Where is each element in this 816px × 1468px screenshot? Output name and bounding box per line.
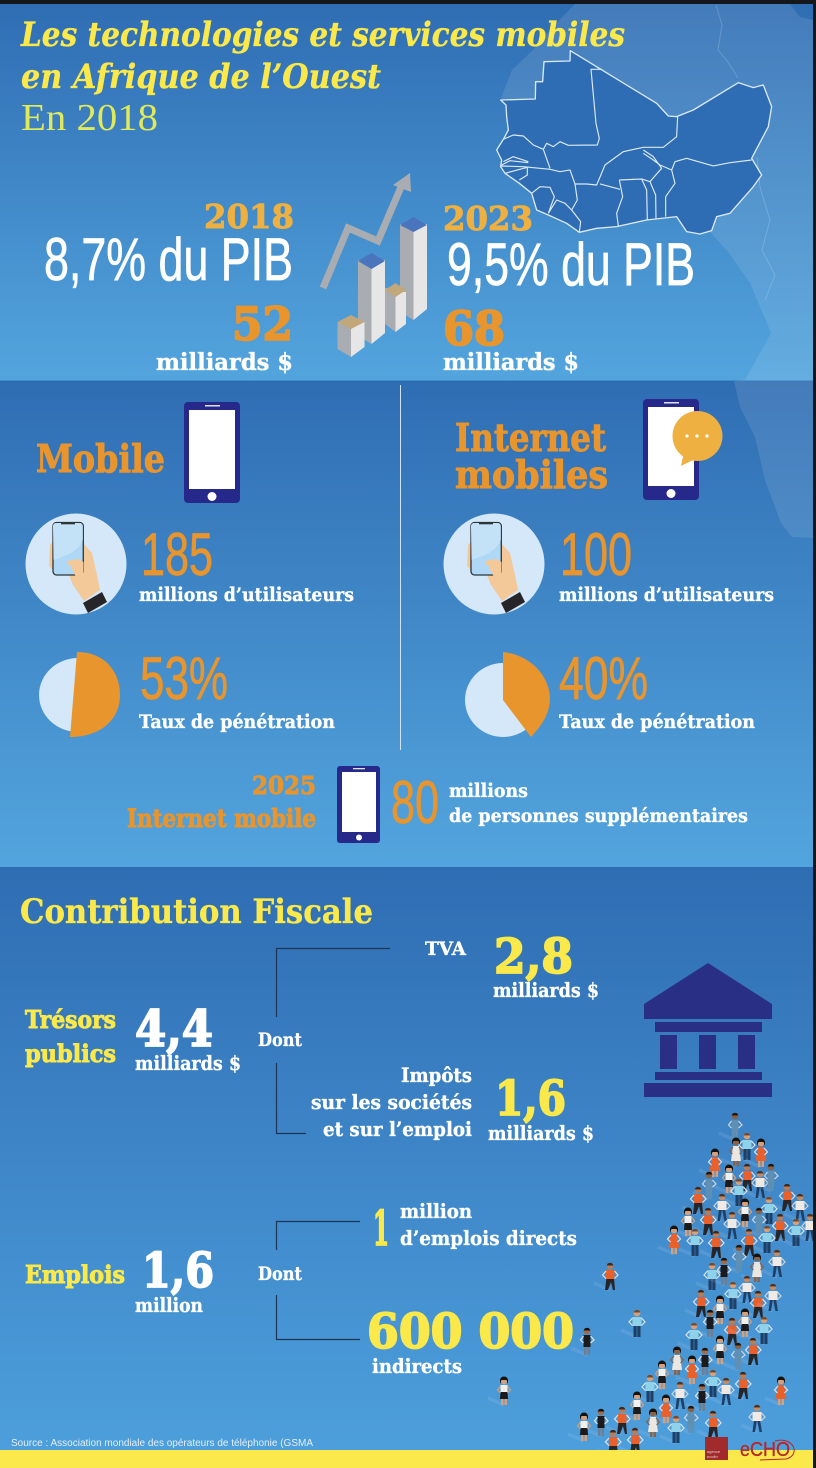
heading: Contribution Fiscale: Contribution Fiscale — [20, 892, 373, 932]
connector lines — [276, 948, 390, 1340]
top dark edge — [0, 0, 816, 4]
stat: 100 million users: millions d’utilisateurs — [559, 584, 774, 606]
map: Africa silhouette — [501, 4, 813, 538]
stats 2023: 9,5% du PIB — [447, 231, 695, 298]
logo: Echo: eCHO — [740, 1439, 790, 1461]
label: Emplois: Emplois — [25, 1260, 125, 1289]
label: TVA: TVA — [425, 938, 466, 960]
logo: red square — [705, 1437, 728, 1460]
stat: 600 000 indirect jobs: indirects — [372, 1354, 462, 1378]
stat: 1,6 milliards — [488, 1071, 594, 1145]
heading: Internet mobiles: mobiles — [455, 452, 608, 497]
stat: 80 million additional people — [391, 769, 748, 836]
panel: mobile background — [0, 380, 813, 868]
label: Dont: Dont — [258, 1263, 302, 1285]
heading: Mobile: Mobile — [36, 436, 165, 481]
label: 2025 Internet mobile — [127, 771, 316, 833]
label: corporate and employment taxes — [311, 1063, 472, 1141]
stat: 2,8 milliards: milliards $ — [493, 978, 599, 1002]
stat: 185 million users — [139, 521, 354, 606]
stat: 80 million additional people: de personnes supplémentaires — [449, 805, 748, 827]
stats 2018: milliards $ — [156, 349, 293, 376]
label: Dont: Dont — [258, 1029, 302, 1051]
stats 2018 — [44, 197, 294, 376]
stat: 1,6 million jobs: 1,6 — [142, 1243, 214, 1299]
stat: 53% penetration — [139, 645, 335, 733]
stat: 4,4 milliards: 4,4 — [135, 999, 213, 1058]
icon: hand holding phone — [26, 514, 126, 614]
pie chart: 40% — [465, 652, 550, 737]
label: 2025 Internet mobile: 2025 — [252, 771, 316, 800]
stats 2023: 68 — [443, 302, 505, 357]
stat: 185 million users: millions d’utilisateurs — [139, 584, 354, 606]
title: En 2018 — [21, 97, 158, 139]
label: corporate and employment taxes: sur les sociétés — [311, 1090, 472, 1114]
heading: Internet mobiles — [455, 415, 608, 497]
stat: 53% penetration: Taux de pénétration — [139, 711, 335, 733]
label: 2025 Internet mobile: Internet mobile — [127, 804, 316, 833]
label: corporate and employment taxes: Impôts — [401, 1063, 472, 1087]
stat: 80 million additional people: millions — [449, 780, 528, 802]
icon: phone with chat bubble — [643, 399, 722, 500]
stat: 1 million direct jobs: million — [400, 1199, 472, 1223]
stats 2018: 8,7% du PIB — [44, 226, 293, 293]
heading: Internet mobiles: Internet — [455, 415, 606, 460]
logo: red square: ecofin — [707, 1454, 718, 1459]
stat: 600 000 indirect jobs: 600 000 — [367, 1304, 574, 1360]
stats 2023: milliards $ — [443, 349, 579, 376]
map: West Africa countries — [497, 51, 772, 234]
panel: fiscal contribution background — [0, 867, 813, 1450]
stat: 4,4 milliards — [135, 999, 241, 1075]
stats 2023 — [443, 199, 695, 376]
stat: 2,8 milliards — [493, 929, 599, 1002]
title: Les technologies et services mobiles — [20, 15, 625, 55]
source: Source : Association mondiale des opérateurs de téléphonie (GSMA — [11, 1438, 313, 1449]
divider — [400, 385, 401, 750]
stat: 40% penetration — [559, 645, 755, 733]
illustration: crowd of people — [488, 1113, 816, 1457]
stat: 100 million users: 100 — [560, 521, 632, 588]
stat: 1,6 milliards: milliards $ — [488, 1121, 594, 1145]
pie chart: 53% — [39, 652, 120, 737]
title — [20, 15, 625, 139]
stat: 40% penetration: 40% — [559, 645, 648, 712]
yellow footer band — [0, 1450, 813, 1468]
stat: 4,4 milliards: milliards $ — [135, 1051, 241, 1075]
stat: 1 million direct jobs: 1 — [373, 1201, 389, 1257]
icon: phone — [184, 402, 240, 503]
stats 2018: 52 — [232, 297, 293, 351]
map: faint neighbouring borders — [716, 5, 775, 300]
stat: 1,6 million jobs — [135, 1243, 214, 1317]
panel: overview background — [0, 4, 813, 381]
stat: 100 million users — [559, 521, 774, 606]
stat: 53% penetration: 53% — [140, 645, 228, 712]
title: en Afrique de l’Ouest — [21, 57, 381, 97]
stat: 40% penetration: Taux de pénétration — [559, 711, 755, 733]
icon: bank — [644, 963, 772, 1097]
stat: 1,6 milliards: 1,6 — [495, 1071, 566, 1127]
label: Trésors publics: publics — [25, 1039, 116, 1068]
stats 2018: 2018 — [204, 197, 294, 236]
stat: 80 million additional people: 80 — [391, 769, 439, 836]
icon: small phone — [337, 766, 380, 843]
stat: 2,8 milliards: 2,8 — [494, 929, 573, 985]
label: Trésors publics: Trésors — [25, 1005, 116, 1034]
stats 2023: 2023 — [443, 199, 533, 238]
stat: 185 million users: 185 — [141, 521, 213, 588]
right dark edge — [813, 0, 816, 1468]
label: Trésors publics — [25, 1005, 116, 1068]
stat: 1 million direct jobs — [373, 1199, 577, 1257]
stat: 1,6 million jobs: million — [135, 1293, 203, 1317]
label: corporate and employment taxes: et sur l’emploi — [323, 1117, 472, 1141]
logo: red square: agence — [707, 1449, 721, 1454]
icon: hand holding phone — [444, 514, 544, 614]
stat: 1 million direct jobs: d’emplois directs — [400, 1226, 577, 1250]
icon: growth chart — [323, 173, 427, 357]
